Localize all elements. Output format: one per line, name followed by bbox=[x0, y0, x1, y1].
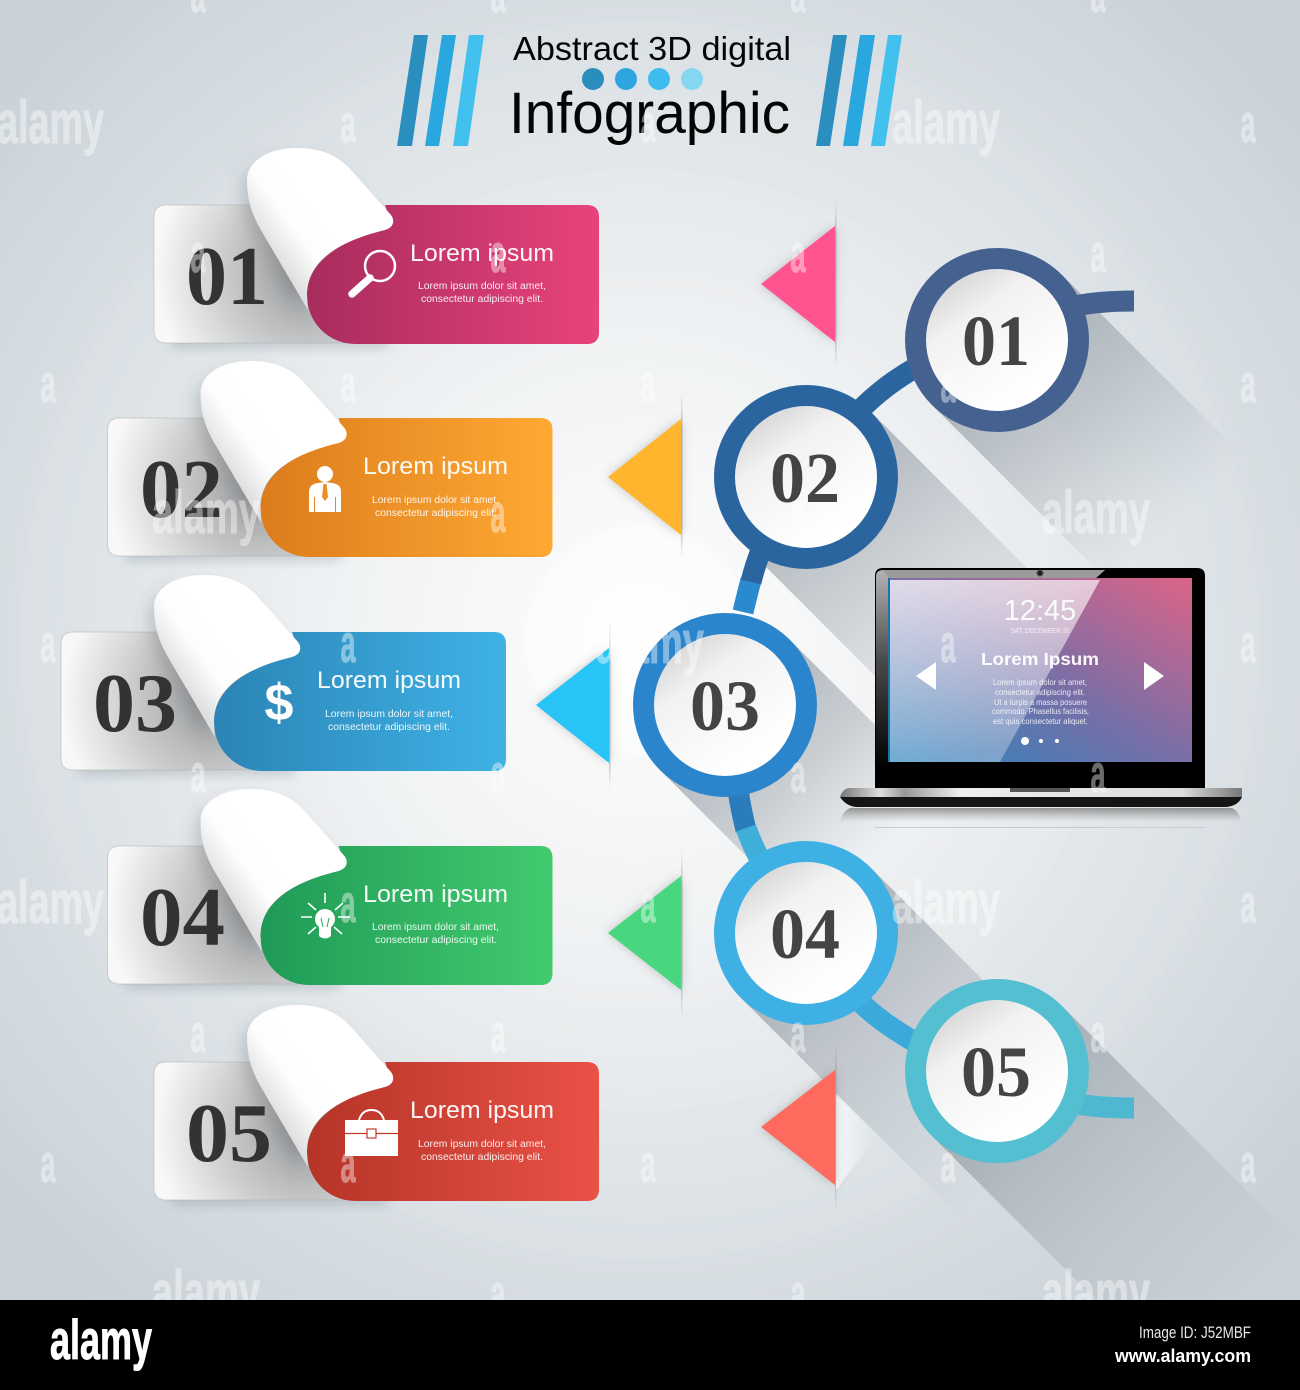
laptop arrows bbox=[916, 662, 1164, 690]
footer url: www.alamy.com bbox=[1114, 1346, 1251, 1366]
ring 03 bbox=[644, 624, 806, 786]
watermark pattern: a bbox=[1090, 744, 1106, 804]
icon: businessman bbox=[309, 466, 341, 512]
triangle: pink bbox=[761, 200, 836, 368]
description: consectetur adipiscing elit. bbox=[421, 1151, 543, 1163]
title line 1: Abstract 3D digital bbox=[513, 30, 791, 67]
ring 03: 03 bbox=[690, 666, 760, 746]
triangle: green bbox=[608, 850, 682, 1018]
laptop pagination dots bbox=[1021, 737, 1059, 745]
watermark pattern: alamy bbox=[0, 89, 104, 156]
laptop screen: 12:45 bbox=[1004, 595, 1076, 627]
ring 05 bbox=[916, 990, 1078, 1152]
watermark pattern: a bbox=[490, 1264, 506, 1324]
watermark pattern: alamy bbox=[152, 479, 260, 546]
watermark pattern: a bbox=[40, 614, 56, 674]
icon: magnifier bbox=[352, 251, 395, 294]
description bbox=[372, 921, 499, 946]
watermark pattern: a bbox=[190, 744, 206, 804]
banner 04: Lorem ipsum bbox=[363, 881, 508, 908]
watermark pattern: a bbox=[640, 1134, 656, 1194]
laptop screen: Lorem Ipsum bbox=[981, 649, 1099, 669]
ring 04: 04 bbox=[770, 894, 840, 974]
description: Lorem ipsum dolor sit amet, bbox=[418, 1138, 546, 1150]
footer bar bbox=[0, 1300, 1300, 1390]
watermark pattern: alamy bbox=[892, 89, 1000, 156]
description: Lorem ipsum dolor sit amet, bbox=[325, 708, 453, 720]
watermark pattern: alamy bbox=[1042, 1259, 1150, 1326]
watermark pattern: a bbox=[1240, 354, 1256, 414]
watermark pattern: a bbox=[190, 1004, 206, 1064]
banner 02 bbox=[108, 361, 552, 562]
watermark pattern: alamy bbox=[0, 869, 104, 936]
banner 02: 02 bbox=[140, 443, 223, 536]
description: Lorem ipsum dolor sit amet, bbox=[418, 280, 546, 292]
triangle: yellow bbox=[608, 392, 682, 560]
banner 05 bbox=[154, 1005, 599, 1206]
title line 2: Infographic bbox=[509, 81, 790, 146]
laptop screen bbox=[888, 578, 1192, 762]
watermark pattern: a bbox=[1240, 1134, 1256, 1194]
ring 04 bbox=[724, 852, 888, 1014]
laptop base bbox=[840, 788, 1242, 807]
watermark pattern: a bbox=[640, 354, 656, 414]
footer logo: alamy bbox=[50, 1308, 152, 1371]
icon: dollar: $ bbox=[265, 674, 294, 732]
triangle: blue bbox=[536, 620, 610, 790]
ring 01 bbox=[916, 258, 1078, 422]
ring 02: 02 bbox=[770, 438, 840, 518]
banner 05: Lorem ipsum bbox=[410, 1097, 554, 1124]
watermark pattern: a bbox=[790, 1004, 806, 1064]
watermark pattern: a bbox=[940, 1134, 956, 1194]
banner 03 bbox=[61, 575, 506, 776]
laptop lid bbox=[875, 568, 1205, 788]
watermark pattern: a bbox=[40, 354, 56, 414]
watermark pattern: a bbox=[340, 1134, 356, 1194]
description bbox=[372, 494, 499, 519]
title bbox=[397, 30, 902, 146]
watermark pattern: a bbox=[190, 224, 206, 284]
laptop bbox=[840, 568, 1242, 828]
description: consectetur adipiscing elit. bbox=[375, 507, 497, 519]
watermark pattern: a bbox=[340, 614, 356, 674]
title dots bbox=[582, 68, 703, 90]
triangle: red bbox=[761, 1042, 877, 1212]
watermark pattern: a bbox=[1090, 1004, 1106, 1064]
description bbox=[325, 708, 453, 733]
laptop body text bbox=[992, 677, 1089, 726]
icon: light bulb bbox=[301, 893, 350, 938]
description: Lorem ipsum dolor sit amet, bbox=[372, 494, 499, 506]
laptop body text: Lorem ipsum dolor sit amet, bbox=[993, 677, 1087, 687]
laptop body text: Ut a turpis a massa posuere bbox=[994, 697, 1087, 707]
watermark pattern: a bbox=[340, 354, 356, 414]
banner 03: 03 bbox=[93, 657, 177, 750]
watermark pattern: a bbox=[940, 354, 956, 414]
ring 01: 01 bbox=[962, 301, 1030, 381]
triangle markers bbox=[536, 200, 877, 1212]
ring 05: 05 bbox=[961, 1032, 1031, 1112]
footer image id: Image ID: J52MBF bbox=[1139, 1323, 1251, 1342]
watermark pattern: a bbox=[790, 224, 806, 284]
title stripes right bbox=[816, 35, 902, 146]
description: consectetur adipiscing elit. bbox=[375, 934, 497, 946]
watermark pattern: alamy bbox=[1042, 479, 1150, 546]
laptop screen: SAT, DECEMBER 31 bbox=[1010, 628, 1070, 635]
connectors between rings bbox=[738, 301, 1134, 1108]
description: consectetur adipiscing elit. bbox=[421, 293, 543, 305]
watermark pattern: a bbox=[790, 744, 806, 804]
watermark pattern: a bbox=[490, 744, 506, 804]
ring 02 bbox=[724, 396, 888, 558]
watermark pattern: alamy bbox=[892, 869, 1000, 936]
watermark pattern: a bbox=[1240, 874, 1256, 934]
watermark pattern: a bbox=[1090, 224, 1106, 284]
laptop body text: est quis consectetur aliquet. bbox=[993, 716, 1088, 726]
watermark pattern: a bbox=[1240, 614, 1256, 674]
description: consectetur adipiscing elit. bbox=[328, 721, 450, 733]
watermark pattern: a bbox=[790, 1264, 806, 1324]
banner 01: Lorem ipsum bbox=[410, 240, 554, 267]
watermark pattern: a bbox=[640, 94, 656, 154]
watermark pattern: a bbox=[1240, 94, 1256, 154]
banner 02: Lorem ipsum bbox=[363, 453, 508, 480]
banner 04: 04 bbox=[140, 871, 225, 964]
watermark pattern: a bbox=[340, 874, 356, 934]
watermark pattern: a bbox=[490, 1004, 506, 1064]
description bbox=[418, 280, 546, 305]
banner 01: 01 bbox=[186, 230, 268, 323]
icon: briefcase bbox=[345, 1110, 398, 1156]
laptop reflection bbox=[840, 808, 1241, 828]
laptop body text: consectetur adipiscing elit. bbox=[995, 687, 1085, 697]
watermark pattern: alamy bbox=[596, 609, 704, 676]
watermark pattern: a bbox=[40, 1134, 56, 1194]
description bbox=[418, 1138, 546, 1163]
watermark pattern: a bbox=[940, 614, 956, 674]
watermark pattern: a bbox=[340, 94, 356, 154]
watermark pattern: a bbox=[490, 224, 506, 284]
watermark pattern: a bbox=[490, 484, 506, 544]
long shadows of rings bbox=[660, 275, 1292, 1366]
watermark pattern: a bbox=[790, 484, 806, 544]
banner 04 bbox=[108, 789, 552, 990]
banner 05: 05 bbox=[186, 1087, 272, 1180]
description: Lorem ipsum dolor sit amet, bbox=[372, 921, 499, 933]
watermark pattern: a bbox=[640, 874, 656, 934]
watermark pattern: alamy bbox=[152, 1259, 260, 1326]
title stripes left bbox=[397, 35, 484, 146]
banner 03: Lorem ipsum bbox=[317, 667, 461, 694]
laptop body text: commodo. Phasellus facilisis, bbox=[992, 706, 1089, 716]
banner 01 bbox=[154, 148, 599, 349]
